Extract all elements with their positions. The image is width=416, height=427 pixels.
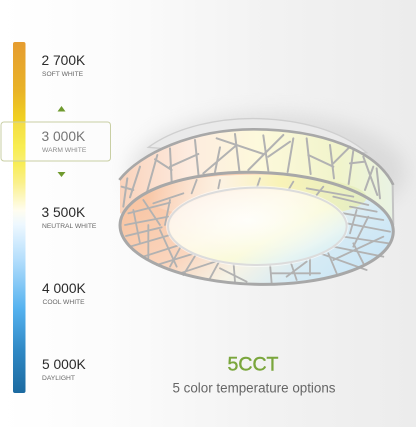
ceiling lamp illustration bbox=[119, 119, 395, 288]
heading: 5CCT: 5CCT bbox=[228, 354, 279, 376]
label: 3500K neutral white: 3 500K bbox=[42, 205, 86, 220]
subheading: 5 color temperature options bbox=[172, 380, 336, 396]
color temperature bar bbox=[13, 42, 26, 393]
highlighted selection: 3000K warm white: WARM WHITE bbox=[42, 147, 87, 154]
lamp side band bbox=[119, 129, 393, 227]
label: 3500K neutral white: NEUTRAL WHITE bbox=[42, 223, 97, 230]
lamp bottom ring bbox=[119, 169, 395, 288]
label: 5000K daylight bbox=[42, 357, 87, 382]
lamp top cap bbox=[148, 119, 367, 157]
label: 2700K soft white bbox=[42, 53, 86, 78]
label: 2700K soft white: 2 700K bbox=[42, 53, 86, 68]
label: 4000K cool white: 4 000K bbox=[42, 281, 87, 296]
label: 5000K daylight: DAYLIGHT bbox=[42, 375, 75, 382]
highlighted selection: 3000K warm white bbox=[1, 122, 110, 161]
highlighted selection: 3000K warm white: 3 000K bbox=[42, 129, 86, 144]
label: 4000K cool white bbox=[42, 281, 87, 306]
arrow down bbox=[58, 172, 66, 177]
label: 3500K neutral white bbox=[42, 205, 97, 230]
wall shadow behind lamp bbox=[130, 114, 406, 230]
label: 5000K daylight: 5 000K bbox=[42, 357, 87, 372]
label: 4000K cool white: COOL WHITE bbox=[42, 299, 85, 306]
arrow up bbox=[58, 106, 66, 112]
lamp center diffuser bbox=[166, 186, 349, 267]
label: 2700K soft white: SOFT WHITE bbox=[42, 71, 84, 78]
